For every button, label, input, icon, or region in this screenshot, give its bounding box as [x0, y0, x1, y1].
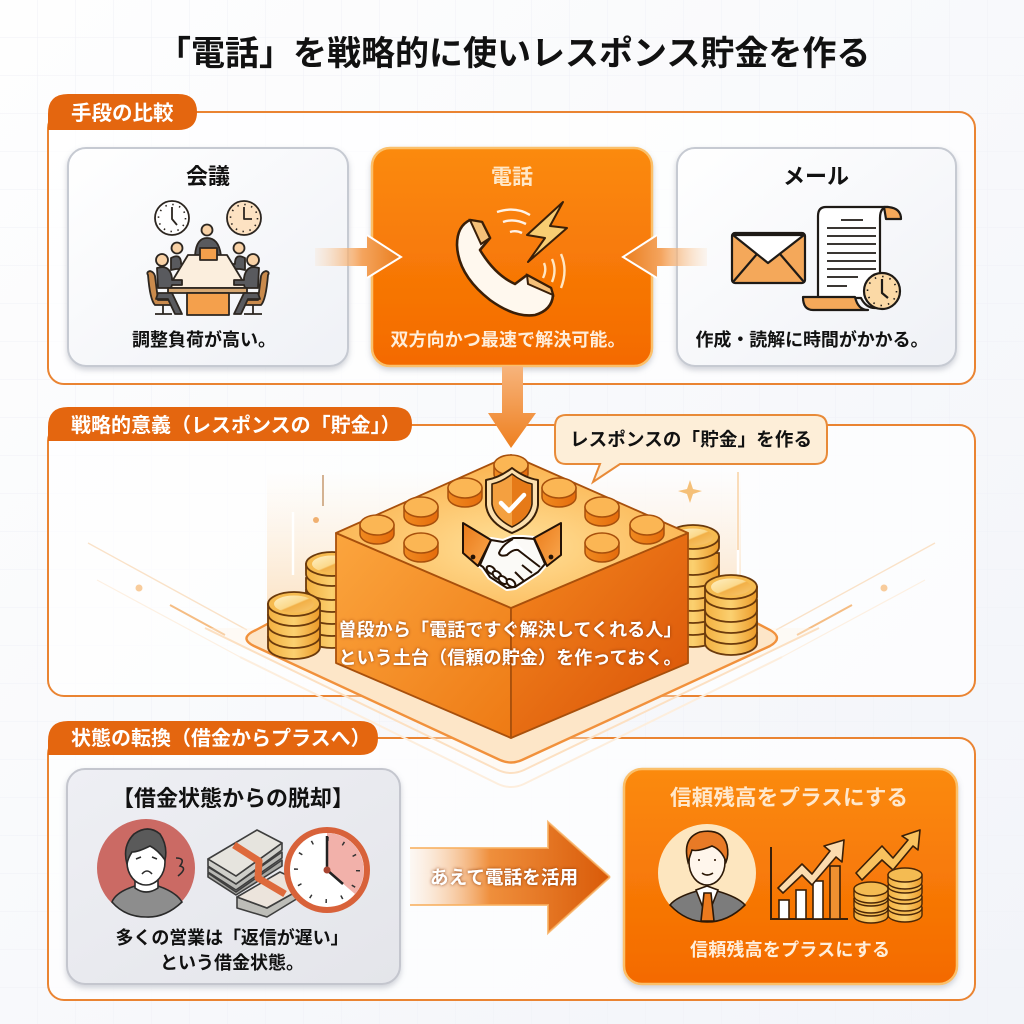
icon: coins with arrow [854, 830, 922, 923]
callout: response savings: レスポンスの「貯金」を作る [570, 429, 812, 450]
card: debt state: という借金状態。 [160, 952, 304, 973]
icon: shield with check [486, 468, 538, 533]
card: phone [372, 148, 652, 366]
card heading: phone: 電話 [491, 166, 533, 189]
title: 「電話」を戦略的に使いレスポンス貯金を作る [157, 35, 870, 73]
card heading: debt state: 【借金状態からの脱却】 [112, 786, 354, 811]
arrow: use phone deliberately [410, 822, 610, 933]
coins: left stacks [268, 552, 358, 659]
caption: meeting: 調整負荷が高い。 [132, 329, 276, 350]
icon: clock [287, 830, 367, 910]
callout: response savings [555, 415, 827, 482]
panel: comparison frame [48, 112, 975, 384]
caption: debt state: 多くの営業は「返信が遅い」 [116, 927, 348, 948]
arrow: meeting to phone [315, 235, 401, 278]
icon: meeting with clocks [147, 201, 269, 315]
icon: businessman [658, 824, 756, 922]
panel: state change frame [48, 738, 975, 1000]
caption: positive trust: 信頼残高をプラスにする [690, 939, 890, 960]
platform layers under block [205, 612, 819, 787]
card: debt state [67, 769, 400, 984]
icon: email and long document [732, 207, 901, 310]
card heading: positive trust: 信頼残高をプラスにする [670, 786, 908, 810]
caption: email: 作成・読解に時間がかかる。 [696, 329, 928, 350]
heading: comparison tab: 手段の比較 [71, 102, 174, 125]
card heading: email: メール [783, 164, 849, 189]
icon: handshake [463, 523, 561, 589]
caption: phone: 双方向かつ最速で解決可能。 [390, 329, 626, 350]
panel: strategic meaning frame [48, 425, 975, 696]
card: meeting [68, 148, 348, 366]
heading: comparison tab [48, 94, 197, 130]
coins: right front stack [705, 575, 757, 655]
icon: money stacks [208, 830, 308, 917]
text: block message [338, 619, 682, 668]
coins: right back stack [667, 525, 719, 647]
icon: bar chart with arrow [771, 840, 848, 919]
arrow: phone down to block [488, 366, 536, 448]
text: block message: 曽段から「電話ですぐ解決してくれる人」 [338, 619, 682, 640]
background glow behind block [88, 470, 935, 657]
card heading: meeting: 会議 [186, 164, 230, 189]
text: block message: という土台（信頼の貯金）を作っておく。 [338, 647, 682, 668]
icon: worried person [97, 819, 195, 917]
iso block [336, 455, 688, 738]
block studs [360, 455, 664, 562]
heading: strategic meaning tab: 戦略的意義（レスポンスの「貯金」） [71, 413, 401, 437]
card: email [677, 148, 956, 366]
heading: state change tab: 状態の転換（借金からプラスへ） [71, 727, 371, 750]
arrow: use phone deliberately: あえて電話を活用 [430, 867, 578, 888]
card: positive trust balance [624, 769, 957, 984]
heading: state change tab [48, 721, 378, 755]
arrow: email to phone [623, 235, 707, 278]
icon: phone with lightning [457, 202, 567, 315]
heading: strategic meaning tab [48, 407, 412, 441]
